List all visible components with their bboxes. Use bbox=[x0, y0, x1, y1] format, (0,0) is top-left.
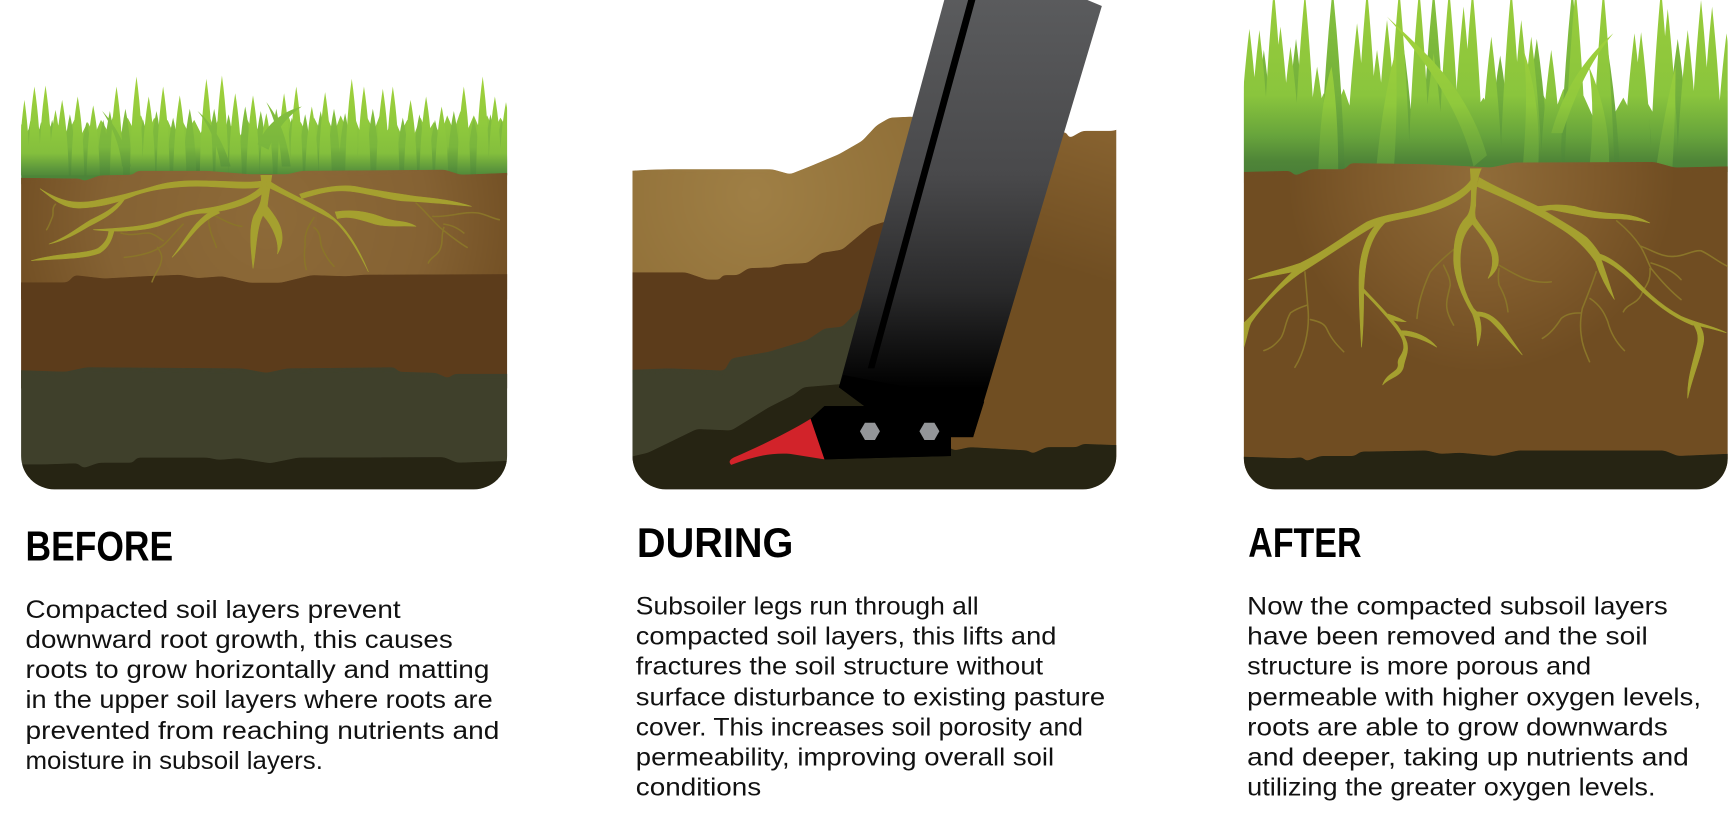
leg centre slit bbox=[868, 0, 975, 368]
text block: during description: surface disturbance to existing pasture bbox=[636, 684, 1105, 712]
text block: after description: and deeper, taking up nutrients and bbox=[1247, 744, 1689, 772]
icon: bolt two bbox=[919, 423, 939, 440]
bedrock dark layer bbox=[22, 457, 507, 490]
text block: during description bbox=[636, 593, 1105, 802]
fractured dark base layer bbox=[632, 384, 1116, 490]
lifted dark brown layer bbox=[632, 222, 884, 370]
grass: after bbox=[1238, 0, 1731, 183]
heading: after: AFTER bbox=[1248, 519, 1361, 566]
topsoil deep layer bbox=[1221, 162, 1731, 477]
right undisturbed soil bbox=[951, 130, 1116, 477]
text block: after description: have been removed and the soil bbox=[1247, 623, 1648, 651]
text block: during description: cover. This increases soil porosity and bbox=[636, 714, 1083, 742]
panel: before soil profile bbox=[21, 76, 508, 490]
text block: during description: compacted soil layers, this lifts and bbox=[636, 623, 1056, 651]
heading: during: DURING bbox=[637, 519, 793, 566]
text block: during description: fractures the soil structure without bbox=[636, 653, 1043, 681]
text block: before description: roots to grow horizontally and matting bbox=[26, 656, 489, 684]
subsoiler leg bbox=[730, 0, 1102, 465]
dark base layer bbox=[1244, 450, 1728, 490]
text block: before description: downward root growth, this causes bbox=[26, 626, 453, 654]
text block: after description: structure is more porous and bbox=[1247, 653, 1591, 681]
foot black block bbox=[811, 375, 984, 459]
text block: after description: utilizing the greater oxygen levels. bbox=[1247, 774, 1656, 802]
compacted dark brown layer bbox=[0, 274, 533, 388]
heading: before: BEFORE bbox=[26, 522, 173, 569]
text block: during description: conditions bbox=[636, 774, 761, 802]
text block: during description: permeability, improving overall soil bbox=[636, 744, 1054, 772]
lifted topsoil layer bbox=[632, 116, 912, 280]
text block: before description: in the upper soil layers where roots are bbox=[26, 686, 493, 714]
text block: before description: moisture in subsoil layers. bbox=[26, 747, 323, 775]
text block: before description bbox=[26, 596, 499, 775]
red share point bbox=[730, 419, 824, 465]
panel: during soil profile bbox=[610, 117, 1143, 510]
topsoil layer bbox=[0, 170, 533, 300]
text block: after description: roots are able to grow downwards bbox=[1247, 714, 1668, 742]
text block: after description: permeable with higher oxygen levels, bbox=[1247, 684, 1701, 712]
olive subsoil layer bbox=[0, 367, 533, 477]
shallow horizontal roots bbox=[31, 175, 499, 282]
text block: before description: prevented from reaching nutrients and bbox=[26, 717, 499, 745]
text block: before description: Compacted soil layers prevent bbox=[26, 596, 401, 624]
lifted olive layer bbox=[632, 309, 860, 472]
text block: after description: Now the compacted subsoil layers bbox=[1247, 593, 1668, 621]
deep spreading roots bbox=[1244, 169, 1728, 398]
text block: after description bbox=[1247, 593, 1701, 802]
grass: before bbox=[19, 75, 513, 184]
text block: during description: Subsoiler legs run through all bbox=[636, 593, 979, 621]
panel: after soil profile bbox=[1221, 0, 1731, 510]
icon: bolt one bbox=[860, 423, 880, 440]
